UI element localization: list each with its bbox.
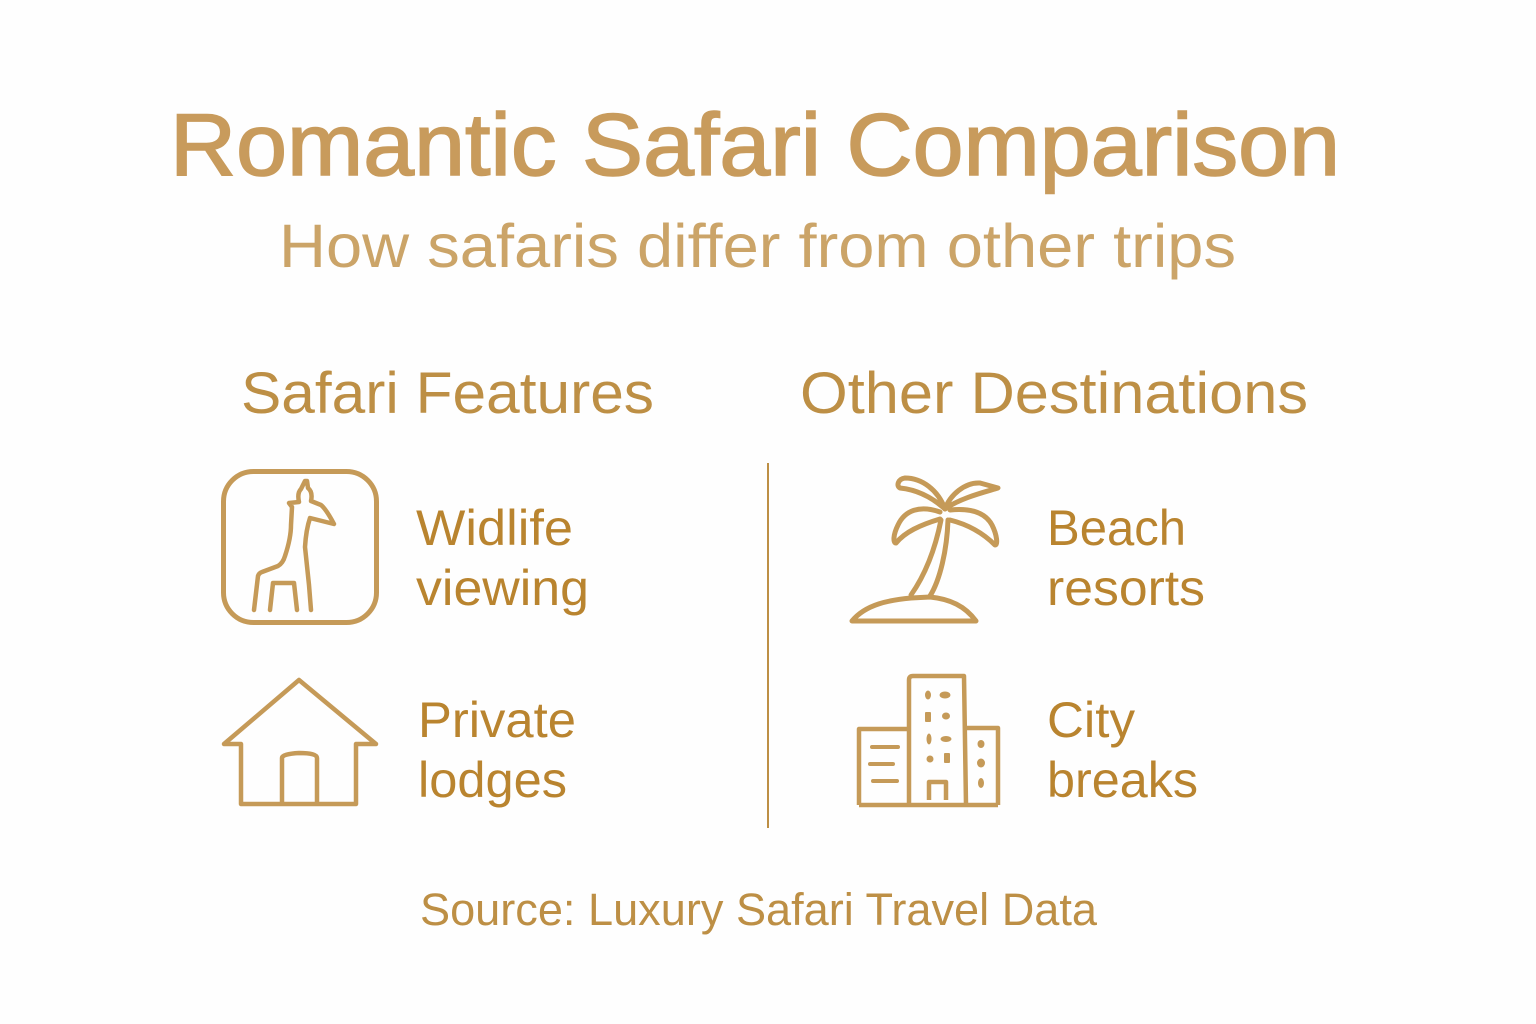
title: Romantic Safari Comparison [170,95,1340,194]
label: private lodges: Private [418,692,576,748]
label: wildlife viewing: Widlife [416,500,573,556]
heading: other destinations: Other Destinations [800,361,1308,426]
icon: palm tree on island [852,478,998,621]
label: wildlife viewing: viewing [416,560,589,616]
label: city breaks [1047,692,1198,808]
subtitle: How safaris differ from other trips [279,212,1236,280]
label: private lodges [418,692,576,808]
icon: city buildings [859,676,998,805]
label: city breaks: breaks [1047,752,1198,808]
label: beach resorts: resorts [1047,560,1205,616]
label: private lodges: lodges [418,752,567,808]
column divider [767,463,769,828]
source note: Source: Luxury Safari Travel Data [420,884,1098,935]
panel: other destinations [852,478,1205,808]
label: beach resorts [1047,500,1205,616]
icon: house [224,680,376,804]
label: city breaks: City [1047,692,1135,748]
panel: safari features [224,472,589,808]
label: beach resorts: Beach [1047,500,1186,556]
heading: safari features: Safari Features [241,361,654,426]
icon: giraffe in rounded square [224,472,376,622]
label: wildlife viewing [416,500,589,616]
